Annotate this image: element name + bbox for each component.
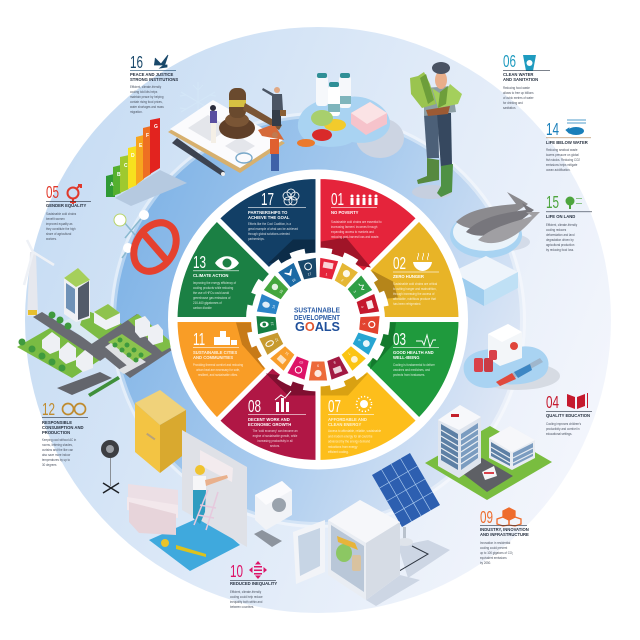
- body text: Efficient, climate-friendly: [546, 223, 577, 227]
- wedge: goal 13: [175, 218, 318, 320]
- heading: CLEAN ENERGY: [328, 422, 361, 427]
- icon: inequality arrows: [249, 561, 267, 579]
- heading: [248, 210, 290, 220]
- icon: infinity: [62, 404, 86, 414]
- illustration: hospital campus: [425, 405, 552, 500]
- body text: [546, 148, 580, 172]
- illustration: open mini fridge: [293, 500, 420, 606]
- tile: goal 7: 7: [347, 351, 351, 356]
- illustration: energy rating bars: E: [139, 143, 143, 149]
- heading: [480, 527, 529, 537]
- body text: expanding access to markets and: [331, 230, 374, 234]
- body text: lowers pressure on global: [546, 153, 579, 157]
- body text: Cooling improves children's: [546, 422, 581, 426]
- heading: [193, 350, 237, 360]
- heading: CONSUMPTION AND: [42, 425, 84, 430]
- body text: reducing post-harvest loss and waste.: [331, 235, 379, 239]
- caption: goal 05 gender equality: [46, 183, 91, 241]
- body text: Cooling is fundamental to deliver: [393, 363, 435, 367]
- caption: goal 10 reduced inequality: [230, 561, 277, 609]
- tile: goal 13: 13: [270, 322, 274, 326]
- heading: DECENT WORK AND: [248, 417, 290, 422]
- illustration: standing fan: [101, 440, 119, 493]
- illustration: fish on plate: [450, 192, 540, 258]
- tile: goal 17: 17: [307, 272, 312, 277]
- icon: growth chart: [275, 391, 291, 412]
- body text: allows to free up billions: [503, 91, 534, 95]
- body text: through global solutions-oriented: [248, 232, 290, 236]
- wedge: goal 02: [318, 218, 461, 320]
- caption: goal 09 industry and innovation: [480, 508, 529, 565]
- tile: goal 8: 8: [333, 360, 336, 365]
- illustration: medicine and food plate: [297, 73, 404, 158]
- body text: [331, 220, 382, 239]
- number 17: 17: [261, 190, 274, 210]
- sector: goal 02 zero hunger: [393, 253, 439, 306]
- icon: people: [350, 194, 378, 205]
- body text: 30 degrees: [42, 463, 57, 467]
- illustration: gavel on law book: [168, 88, 285, 173]
- body text: [252, 429, 298, 448]
- heading: PARTNERSHIPS TO: [248, 210, 288, 215]
- body text: great example of what can be achieved: [248, 227, 298, 231]
- body text: [42, 438, 76, 467]
- heading: AFFORDABLE AND: [328, 417, 367, 422]
- heading: [42, 420, 84, 435]
- body text: increasing productivity in all: [257, 439, 293, 443]
- illustration: energy rating bars: C: [124, 163, 128, 169]
- tile: goal 10: 10: [299, 360, 304, 365]
- body text: for drinking and: [503, 101, 523, 105]
- body text: [328, 429, 381, 454]
- heading: REDUCED INEQUALITY: [230, 581, 277, 586]
- body text: [503, 86, 534, 110]
- caption: goal 12 responsible consumption: [42, 400, 88, 467]
- heading: AND INFRASTRUCTURE: [480, 532, 529, 537]
- body text: inequality both within and: [230, 600, 262, 604]
- body text: deforestation and land: [546, 233, 575, 237]
- tile: goal 15: 15: [279, 289, 284, 294]
- number 01: 01: [331, 190, 344, 210]
- body text: curtains and the like can: [42, 448, 73, 452]
- icon: fish and waves: [566, 120, 586, 135]
- number 04: 04: [546, 393, 559, 413]
- illustration: wind turbine: [24, 240, 54, 316]
- body text: increasing farmers' incomes through: [331, 225, 377, 229]
- heading: QUALITY EDUCATION: [546, 413, 590, 418]
- wheel: sector wedges: [175, 176, 461, 462]
- body text: cooling products while reducing: [193, 286, 233, 290]
- body text: cooling could help reduce: [230, 595, 263, 599]
- body text: Providing thermal comfort and reducing: [193, 363, 243, 367]
- number 12: 12: [42, 400, 55, 420]
- body text: Efficient, climate-friendly: [130, 85, 161, 89]
- body text: by reducing food loss.: [546, 248, 574, 252]
- body text: efficient cooling.: [328, 450, 349, 454]
- body text: cooling could prevent: [480, 546, 507, 550]
- number 10: 10: [230, 562, 243, 582]
- body text: contain rising food prices,: [130, 100, 163, 104]
- illustration: energy rating bars: G: [154, 124, 158, 130]
- heading: PEACE AND JUSTICE: [130, 72, 174, 77]
- body text: through increasing the access of: [393, 292, 434, 296]
- body text: protects from heatwaves.: [393, 373, 425, 377]
- illustration: energy rating bars: A: [110, 182, 114, 188]
- body text: emissions helps mitigate: [546, 163, 577, 167]
- tile: goal 16: 16: [291, 278, 297, 283]
- body text: temperatures by up to: [42, 458, 70, 462]
- body text: Sustainable cold chains are essential to: [331, 220, 382, 224]
- body text: 210-460 gigatonnes of: [193, 301, 222, 305]
- body text: Access to affordable, reliable, sustainable: [328, 429, 381, 433]
- number 15: 15: [546, 193, 559, 213]
- heading: LIFE BELOW WATER: [546, 140, 588, 145]
- illustration: green city: [17, 268, 175, 397]
- background: inner disc: [113, 115, 523, 525]
- tile: goal 11: 11: [284, 351, 290, 356]
- body text: [546, 223, 577, 252]
- icon: city: [214, 331, 237, 345]
- body text: educational settings.: [546, 432, 572, 436]
- sector: goal 08 decent work: [248, 391, 306, 448]
- body text: The 'cold economy' can become an: [252, 429, 298, 433]
- heading: PRODUCTION: [42, 430, 70, 435]
- body text: [230, 590, 263, 609]
- tile: goal 14: 14: [271, 304, 276, 309]
- body text: engine of sustainable growth, while: [253, 434, 297, 438]
- illustration: energy rating bars: B: [117, 172, 121, 178]
- body text: of cubic metres of water: [503, 96, 534, 100]
- icon: bowl: [413, 253, 432, 271]
- tile: goal 12: 12: [274, 337, 279, 343]
- illustration: woman figure: [210, 105, 217, 143]
- icon: eye: [215, 256, 239, 270]
- tile: goal 3: 3: [353, 290, 357, 294]
- icon: sun: [356, 396, 372, 412]
- body text: improved equality as: [46, 222, 73, 226]
- body text: between countries.: [230, 605, 254, 609]
- number 16: 16: [130, 53, 143, 73]
- heading: [130, 72, 178, 82]
- sector: goal 13 climate action: [193, 253, 239, 310]
- body text: Reducing food waste: [503, 86, 530, 90]
- body text: [46, 212, 76, 241]
- body text: the use of HFCs could avoid: [193, 291, 229, 295]
- body text: cooling reduces: [546, 228, 566, 232]
- body text: by 2050.: [480, 561, 491, 565]
- heading: SUSTAINABLE CITIES: [193, 350, 237, 355]
- illustration: yellow retro fridge: [135, 390, 186, 473]
- body text: cooling told kits helps: [130, 90, 158, 94]
- illustration: energy rating bars: [106, 118, 187, 206]
- caption: goal 14 life below water: [546, 120, 591, 172]
- wedge: goal 03: [318, 320, 461, 421]
- heading: ECONOMIC GROWTH: [248, 422, 291, 427]
- icon: gender symbol: [68, 185, 81, 204]
- number 03: 03: [393, 330, 406, 350]
- body text: also save more indoor: [42, 453, 71, 457]
- heading: NO POVERTY: [331, 210, 359, 215]
- body text: benefit women: [46, 217, 65, 221]
- body text: Reducing seafood waste: [546, 148, 578, 152]
- illustration: pen: [172, 138, 225, 176]
- wedge: goal 11: [175, 320, 318, 421]
- heading: WELL-BEING: [393, 355, 420, 360]
- body text: share of agricultural: [46, 232, 71, 236]
- illustration: air conditioner boxes: [127, 484, 178, 535]
- number 08: 08: [248, 397, 261, 417]
- icon: heartbeat: [416, 335, 436, 347]
- icon: tree: [566, 196, 582, 209]
- number 07: 07: [328, 397, 341, 417]
- number 05: 05: [46, 183, 59, 203]
- illustration: man in suit: [262, 87, 286, 126]
- illustration: farmer holding vegetables: [410, 62, 462, 199]
- body text: Keeping cool without AC in: [42, 438, 76, 442]
- body text: [546, 422, 581, 436]
- body text: they constitute the high: [46, 227, 76, 231]
- icon: open book: [567, 393, 588, 409]
- body text: ocean acidification.: [546, 168, 571, 172]
- heading: GOOD HEALTH AND: [393, 350, 434, 355]
- body text: [130, 85, 164, 114]
- number 06: 06: [503, 52, 516, 72]
- body text: resilient, and sustainable cities.: [198, 373, 238, 377]
- tile: goal 2: 2: [340, 278, 344, 283]
- heading: STRONG INSTITUTIONS: [130, 77, 178, 82]
- illustration: freezer cabinet: [452, 256, 518, 306]
- body text: Efforts like the Cool Coalition, is a: [248, 222, 291, 226]
- body text: and modern energy for all could be: [328, 434, 373, 438]
- tile: goal 5: 5: [362, 323, 366, 325]
- wheel: inner shadows: [236, 238, 398, 396]
- body text: Efficient, climate-friendly: [230, 590, 261, 594]
- center logo: Sustainable Development Goals: DEVELOPMENT: [294, 313, 340, 322]
- body text: rooms, lettering shades,: [42, 443, 73, 447]
- caption: goal 15 life on land: [546, 193, 592, 252]
- sector: goal 03 good health: [393, 330, 439, 377]
- illustration: snowflake: [180, 82, 216, 122]
- body text: reductions from energy: [328, 444, 358, 449]
- icon: water glass: [523, 55, 536, 71]
- number 11: 11: [193, 330, 205, 350]
- body text: advanced by the energy demand: [328, 439, 370, 444]
- body text: [393, 282, 437, 306]
- body text: Sustainable cold chains are critical: [393, 282, 437, 286]
- body text: maintain peace by helping: [130, 95, 164, 99]
- sector: goal 07 clean energy: [328, 396, 381, 454]
- body text: workers.: [46, 237, 57, 241]
- caption: goal 16 peace and justice: [130, 53, 178, 114]
- heading: ZERO HUNGER: [393, 274, 424, 279]
- center logo: Sustainable Development Goals: GOALS: [295, 319, 340, 334]
- tile: goal 1: 1: [325, 272, 328, 276]
- body text: degradation driven by: [546, 238, 574, 242]
- tile: goal 6: 6: [357, 338, 361, 342]
- illustration: technician installing air conditioner: [149, 430, 247, 571]
- body text: [248, 222, 298, 241]
- body text: sanitation.: [503, 106, 516, 110]
- wedge: goal 17: [217, 176, 318, 320]
- body text: carbon dioxide: [193, 306, 212, 310]
- heading: CLEAN WATER: [503, 72, 533, 77]
- illustration: energy rating bars: F: [146, 133, 149, 139]
- body text: partnerships.: [248, 237, 265, 241]
- illustration: no symbol and molecule: [114, 210, 185, 279]
- caption: goal 06 clean water: [503, 52, 550, 110]
- wedge: goal 01: [318, 176, 419, 320]
- wheel backing ring: [168, 170, 468, 470]
- heading: ACHIEVE THE GOAL: [248, 215, 290, 220]
- sector: goal 01 no poverty: [331, 190, 382, 239]
- sector: goal 11 sustainable cities: [193, 330, 243, 377]
- body text: to cutting hunger and malnutrition,: [393, 287, 437, 291]
- heading: RESPONSIBLE: [42, 420, 72, 425]
- body text: sectors.: [270, 444, 280, 448]
- body text: productivity and comfort in: [546, 427, 580, 431]
- heading: [328, 417, 367, 427]
- center logo: Sustainable Development Goals: [294, 306, 340, 334]
- heading: [248, 417, 291, 427]
- heading: LIFE ON LAND: [546, 214, 575, 219]
- illustration: energy rating bars: D: [131, 153, 135, 159]
- body text: [193, 281, 236, 310]
- icon: flower rings: [283, 189, 299, 205]
- heading: [393, 350, 434, 360]
- body text: fish stocks. Reducing CO2: [546, 158, 580, 162]
- icon: cubes: [497, 508, 521, 526]
- heading: CLIMATE ACTION: [193, 273, 228, 278]
- heading: [503, 72, 538, 82]
- body text: equivalent emissions: [480, 556, 507, 560]
- center logo: Sustainable Development Goals: SUSTAINABLE: [294, 306, 340, 314]
- body text: up to 100 gigatons of CO₂: [480, 551, 514, 555]
- tile: goal 9: 9: [317, 364, 319, 368]
- body text: vaccines and medicines, and: [393, 368, 430, 372]
- heading: INDUSTRY, INNOVATION: [480, 527, 529, 532]
- body text: water shortages and mass: [130, 105, 164, 109]
- body text: migration.: [130, 110, 143, 114]
- wedge: goal 08: [217, 320, 318, 462]
- illustration: medical supplies plate: [464, 324, 560, 390]
- icon: dove: [154, 55, 168, 68]
- illustration: outdoor AC unit: [254, 481, 292, 547]
- wheel: white gear hub: [249, 250, 387, 388]
- number 13: 13: [193, 253, 206, 273]
- illustration: man in orange shirt: [270, 132, 279, 171]
- body text: Innovation in residential: [480, 541, 510, 545]
- caption: goal 04 quality education: [546, 393, 592, 436]
- body text: agricultural production: [546, 243, 574, 247]
- heading: AND COMMUNITIES: [193, 355, 233, 360]
- number 02: 02: [393, 254, 406, 274]
- sector: goal 17 partnerships: [248, 189, 306, 241]
- number 09: 09: [480, 508, 493, 528]
- number 14: 14: [546, 120, 559, 140]
- tile: goal 4: 4: [360, 305, 364, 308]
- body text: Improving the energy efficiency of: [193, 281, 236, 285]
- wedge: goal 07: [318, 320, 419, 462]
- illustration: solar panel: [372, 453, 450, 578]
- heading: AND SANITATION: [503, 77, 538, 82]
- goal tile ring: [256, 258, 380, 380]
- heading: GENDER EQUALITY: [46, 203, 86, 208]
- body text: urban heat are necessary for safe,: [196, 368, 240, 372]
- body text: greenhouse gas emissions of: [193, 296, 230, 300]
- body text: Sustainable cold chains: [46, 212, 76, 216]
- body text: [193, 363, 243, 377]
- body text: [480, 541, 514, 565]
- body text: affordable, nutritious produce that: [393, 297, 436, 301]
- body text: [393, 363, 435, 377]
- body text: has been refrigerated.: [393, 302, 421, 306]
